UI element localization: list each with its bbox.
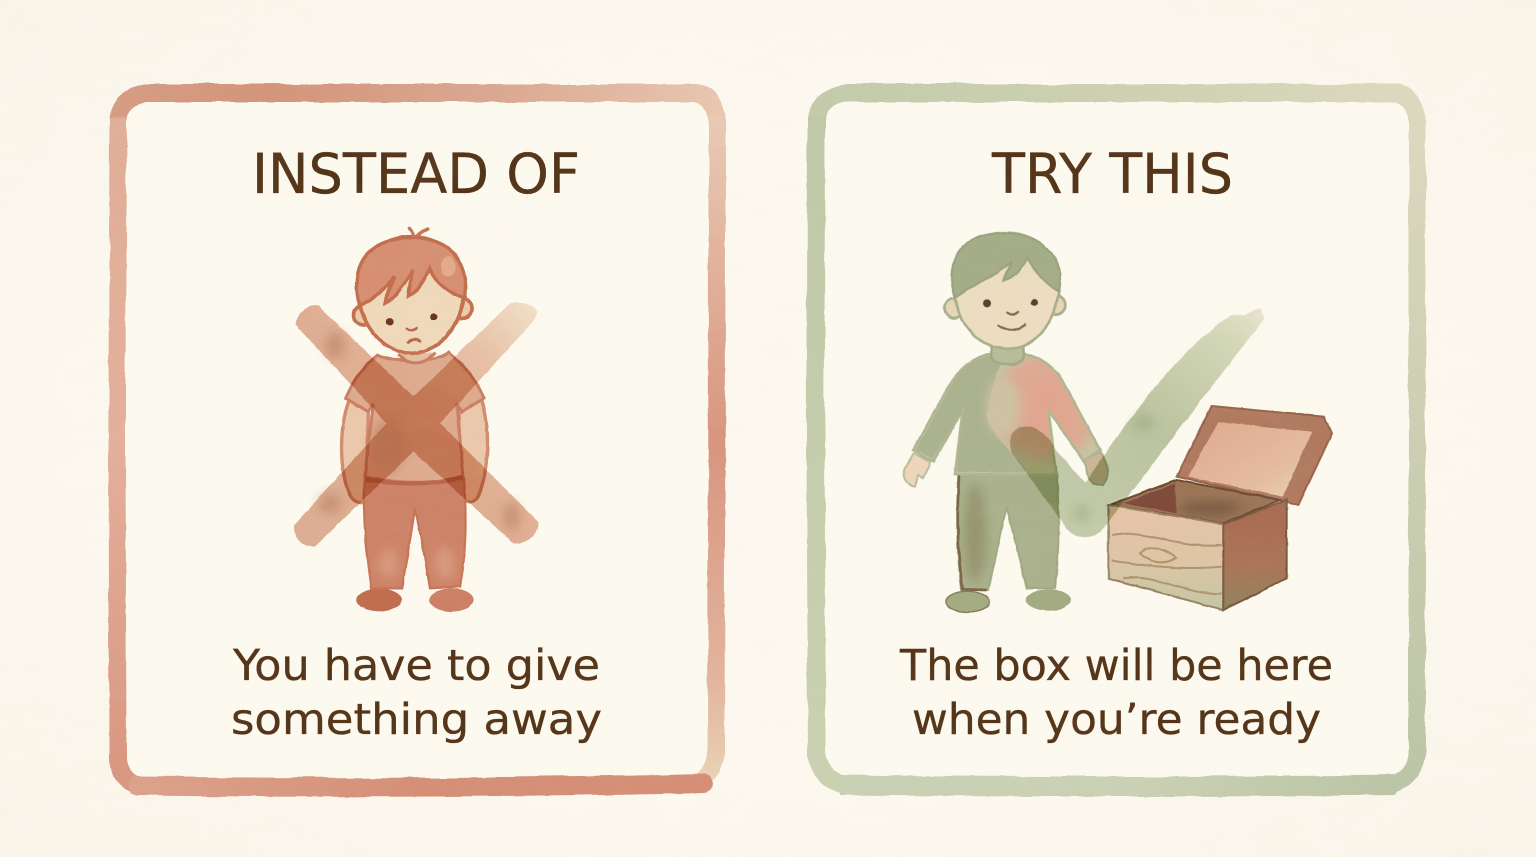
caption line 1: The box will be here xyxy=(899,641,1333,691)
boy: pants xyxy=(364,478,465,588)
check mark shadow blots xyxy=(1073,415,1154,521)
boy: pants highlights xyxy=(379,547,454,580)
boy: sweater green wash xyxy=(916,355,1027,473)
chest lid outer xyxy=(1177,406,1332,505)
chest: interior xyxy=(1110,480,1280,523)
red watercolor frame xyxy=(117,93,717,787)
red X overlay xyxy=(294,303,538,547)
boy: eyes xyxy=(386,313,437,325)
boy: hair highlight xyxy=(441,257,456,277)
boy: hair xyxy=(357,238,466,306)
boy: hair tuft xyxy=(409,228,427,237)
caption line 2: something away xyxy=(231,695,602,745)
boy: nose and frown xyxy=(407,328,420,342)
boy: left hand xyxy=(904,453,930,487)
X shadow blots xyxy=(319,331,520,531)
illustration: sad boy with X xyxy=(294,228,538,612)
boy: head xyxy=(357,237,465,353)
boy: feet xyxy=(357,588,474,612)
boy: collar xyxy=(992,347,1024,365)
panel: try this xyxy=(815,93,1417,786)
caption line 1: You have to give xyxy=(232,641,600,691)
card fill: instead of xyxy=(125,100,711,780)
boy: head xyxy=(953,233,1060,348)
illustration: happy boy, check mark and open box xyxy=(904,233,1332,612)
heading: instead of: INSTEAD OF xyxy=(252,142,580,206)
boy: ears xyxy=(945,295,1065,318)
boy: feet xyxy=(945,589,1071,612)
chest lid inner xyxy=(1188,422,1312,497)
caption: instead of xyxy=(231,641,602,745)
green watercolor frame xyxy=(815,93,1417,786)
boy: hair xyxy=(952,233,1061,297)
boy: right hand xyxy=(1084,452,1108,485)
chest: side xyxy=(1223,500,1287,610)
boy: pants shadow xyxy=(964,483,986,583)
boy: shirt xyxy=(346,353,484,482)
boy: pants dark outline xyxy=(958,475,987,590)
boy: eyes xyxy=(983,299,1038,307)
boy: collar xyxy=(398,353,436,363)
chest: interior floor shadow xyxy=(1180,501,1240,516)
caption: try this xyxy=(899,641,1333,745)
panel: instead of xyxy=(117,93,717,787)
boy: pants xyxy=(957,473,1058,590)
boy: ears xyxy=(354,298,472,325)
caption line 2: when you’re ready xyxy=(912,695,1321,745)
green check mark overlay xyxy=(1010,308,1265,537)
boy: sweater xyxy=(913,353,1100,475)
heading: try this: TRY THIS xyxy=(991,142,1233,206)
chest: interior shadow xyxy=(1123,483,1177,513)
chest: lid xyxy=(1177,406,1332,505)
chest: wood grain xyxy=(1112,534,1222,594)
card fill: try this xyxy=(824,100,1412,780)
boy: nose and smile xyxy=(998,312,1025,330)
boy: arms xyxy=(342,400,487,503)
chest: front xyxy=(1108,505,1223,610)
boy: sweater light patch xyxy=(987,377,1020,437)
boy: waistband xyxy=(366,477,463,483)
